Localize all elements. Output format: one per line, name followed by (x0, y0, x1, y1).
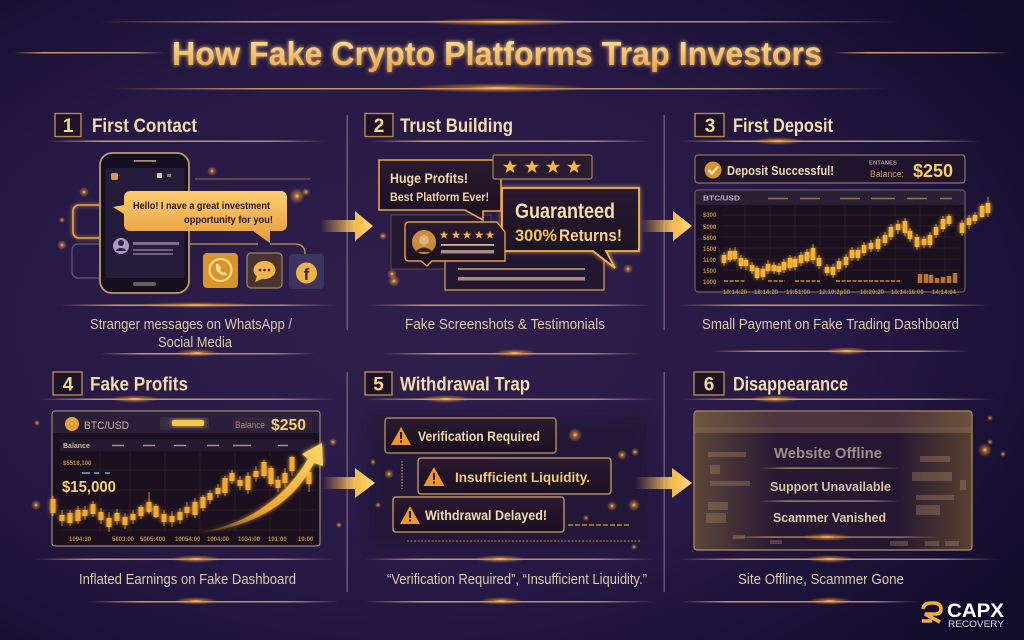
deposit banner: Deposit Successful! (727, 163, 834, 178)
step 5 heading (365, 372, 655, 403)
guaranteed bubble: 300% (515, 226, 557, 245)
step 6 heading: 6 (704, 374, 714, 396)
profit dashboard: 19:00 (298, 537, 314, 543)
candlestick dashboard: 5800 (703, 236, 717, 242)
arrow: 5 to 6 (635, 468, 692, 498)
profit dashboard: Balance (235, 420, 265, 430)
alert: withdrawal delayed (393, 497, 564, 532)
star rating box (493, 155, 592, 179)
caption 6: Site Offline, Scammer Gone (738, 572, 904, 588)
profit dashboard: $15,000 (62, 479, 116, 496)
back screenshot cards (391, 215, 604, 290)
icon: facebook (289, 254, 324, 289)
panel 5: withdrawal trap (365, 372, 655, 605)
arrow: 1 to 2 (320, 211, 373, 241)
title: How Fake Crypto Platforms Trap Investors (172, 35, 822, 72)
review bubble: Best Platform Ever! (390, 190, 489, 204)
profit dashboard: 1034:00 (238, 537, 261, 543)
title (14, 18, 1010, 93)
candlestick dashboard: 10:14:16:00 (891, 290, 924, 296)
guaranteed bubble: Guaranteed (515, 200, 615, 223)
profit dashboard: 191:00 (268, 537, 287, 543)
caption 4 (35, 555, 340, 605)
step 1 heading: 1 (63, 116, 74, 137)
logo: capx recovery: CAPX (947, 601, 1004, 622)
alert: insufficient liquidity (418, 458, 611, 494)
vanished site window: Website Offline (774, 445, 882, 462)
vanished site window (694, 411, 1006, 550)
panel 6: disappearance (680, 372, 1006, 605)
caption 3 (680, 304, 990, 355)
caption 5: “Verification Required”, “Insufficient Liquidity.” (387, 572, 647, 588)
step 6 heading (680, 372, 995, 403)
sparkles (379, 232, 633, 287)
panel 4: fake profits (31, 372, 342, 605)
panel 3: first deposit (680, 114, 990, 355)
speech bubble (113, 191, 287, 243)
candlestick dashboard: 1500 (703, 269, 717, 275)
alert: insufficient liquidity: Insufficient Liquidity. (455, 469, 590, 485)
step 4 heading: 4 (63, 374, 74, 396)
candlestick dashboard (695, 190, 988, 296)
review bubble: Huge Profits! (390, 170, 468, 186)
deposit banner: Balance: (870, 169, 904, 180)
logo: capx recovery: RECOVERY (948, 619, 1005, 630)
step 2 heading (365, 114, 650, 142)
review bubble (379, 160, 501, 220)
speech bubble: opportunity for you! (184, 214, 273, 226)
circuit glow background (368, 416, 648, 550)
candlestick dashboard: 12:10:2p00 (819, 290, 851, 296)
rising arrow (190, 443, 323, 534)
deposit banner: ENTANES (869, 160, 897, 166)
profit dashboard: 5803:00 (112, 537, 135, 543)
candlestick dashboard: 1500 (703, 247, 717, 253)
icon: chat (247, 253, 282, 288)
sparkles (57, 166, 310, 250)
profit dashboard: $250 (271, 417, 306, 434)
candlestick dashboard: 19:51:00 (786, 290, 811, 296)
sparkles (31, 420, 342, 528)
step 3 heading: First Deposit (733, 116, 834, 137)
profit dashboard: 1004:00 (207, 537, 230, 543)
step 6 heading: Disappearance (733, 374, 848, 396)
step 5 heading: Withdrawal Trap (400, 374, 530, 396)
step 2 heading: Trust Building (400, 116, 513, 137)
alert: verification required (385, 418, 556, 453)
icon: phone (100, 153, 189, 293)
candlestick dashboard: 10:20:20 (860, 290, 885, 296)
candlestick dashboard: 18:14:20 (754, 290, 779, 296)
reviewer card (405, 222, 505, 266)
icon: facebook: f (304, 265, 310, 284)
candlestick dashboard: 10:14:20 (723, 290, 748, 296)
icon: whatsapp (203, 253, 238, 288)
profit dashboard: BTC/USD (84, 420, 129, 432)
step 2 heading: 2 (374, 116, 384, 137)
vanished site window: Scammer Vanished (773, 510, 886, 525)
guaranteed bubble: Returns! (559, 226, 622, 245)
arrow: 4 to 5 (322, 468, 375, 498)
profit dashboard: 10054:00 (175, 537, 201, 543)
logo: capx recovery (922, 601, 1005, 630)
candlestick dashboard: 5000 (703, 225, 717, 231)
candlestick dashboard: BTC/USD (703, 196, 740, 202)
step 3 heading: 3 (705, 116, 715, 137)
profit dashboard: 1094:30 (69, 537, 92, 543)
candlestick dashboard: 14:14:04 (932, 290, 957, 296)
panel 1: first contact (48, 114, 335, 357)
step 1 heading (48, 114, 326, 142)
step 4 heading: Fake Profits (90, 374, 188, 396)
step 1 heading: First Contact (92, 116, 198, 137)
profit dashboard (52, 411, 320, 546)
caption 5 (365, 555, 655, 605)
guaranteed bubble (502, 188, 639, 268)
deposit banner: $250 (913, 161, 953, 181)
step 5 heading: 5 (373, 374, 384, 396)
candlestick dashboard: $300 (703, 213, 717, 219)
speech bubble: Hello! I nave a great investment (133, 200, 270, 212)
caption 3: Small Payment on Fake Trading Dashboard (702, 317, 959, 333)
profit dashboard: 5005:400 (140, 537, 166, 543)
caption 1: Social Media (158, 335, 233, 351)
profit dashboard: Balance (63, 443, 90, 450)
caption 1: Stranger messages on WhatsApp / (90, 317, 293, 333)
alert: withdrawal delayed: Withdrawal Delayed! (425, 507, 547, 523)
caption 4: Inflated Earnings on Fake Dashboard (79, 572, 296, 588)
panel 2: trust building (365, 114, 650, 357)
candlestick dashboard: 1100 (703, 258, 717, 264)
step 3 heading (680, 114, 980, 145)
caption 6 (680, 555, 1000, 605)
arrow: 2 to 3 (640, 211, 692, 241)
alert: verification required: Verification Required (418, 429, 540, 444)
step 4 heading (38, 372, 336, 403)
background frames (72, 179, 310, 278)
vanished site window: Support Unavailable (770, 479, 891, 494)
caption 2 (370, 304, 650, 357)
candlestick dashboard: 1000 (703, 280, 717, 286)
caption 2: Fake Screenshots & Testimonials (405, 317, 605, 333)
dividers (346, 115, 665, 592)
caption 1 (60, 302, 335, 357)
deposit banner (695, 155, 965, 183)
profit dashboard: $5518,100 (63, 461, 92, 467)
